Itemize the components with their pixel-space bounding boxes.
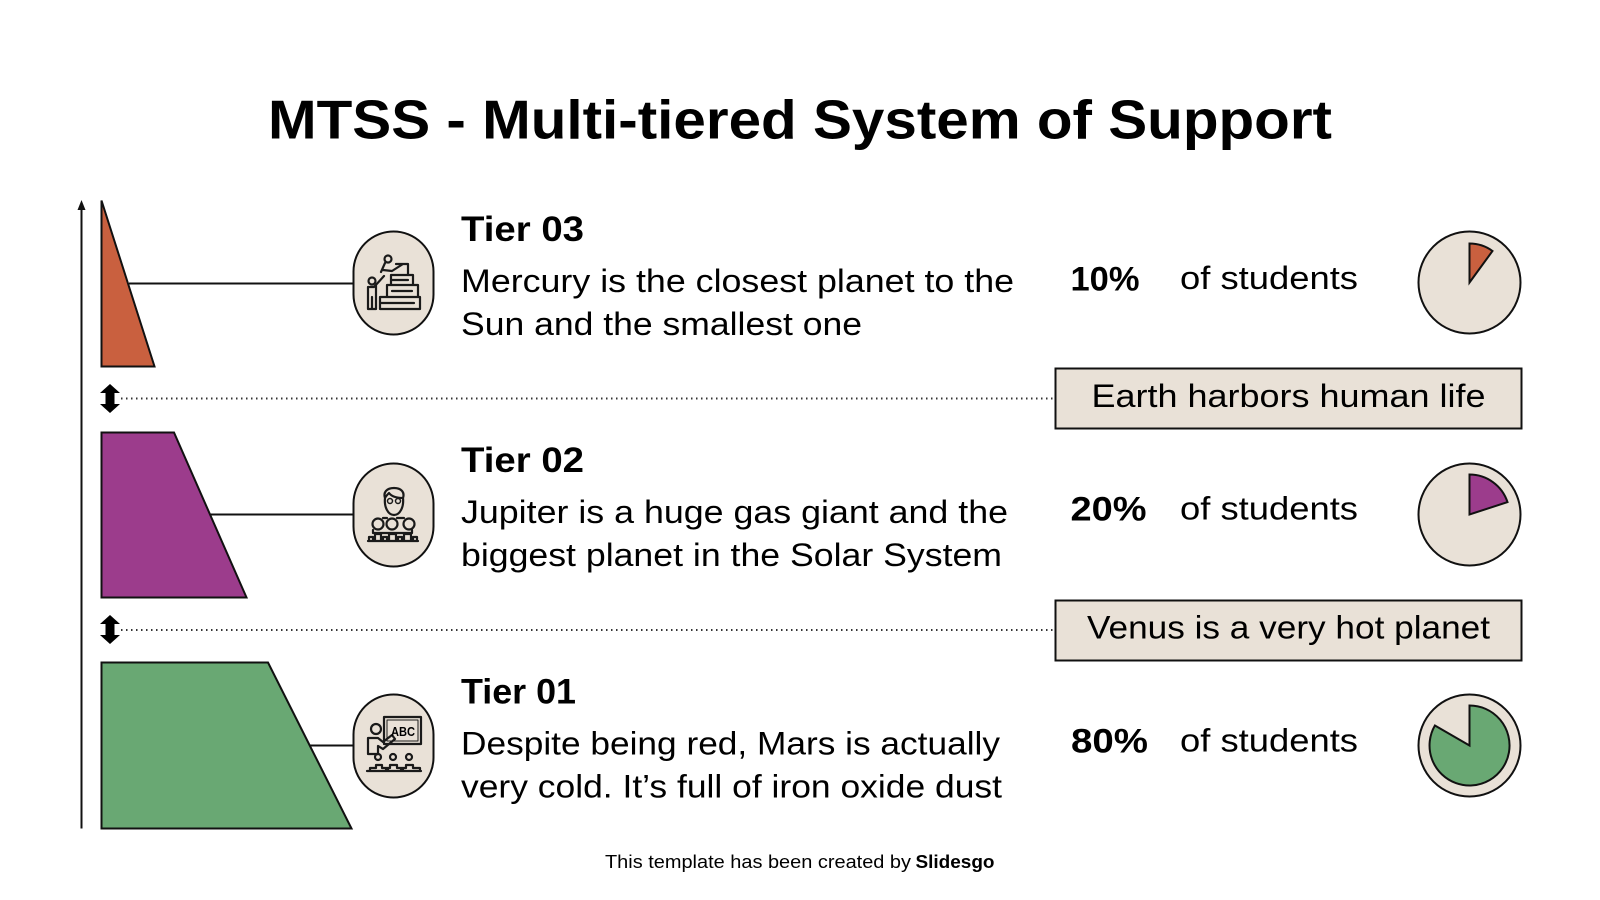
icon: teacher with students — [354, 464, 434, 566]
tier 01 description: Despite being red, Mars is actually — [461, 726, 1000, 762]
dotted divider upper — [121, 398, 1055, 400]
stat: 20 percent — [1070, 490, 1358, 528]
stat: 80 percent: of students — [1180, 722, 1358, 758]
tier 02 description — [461, 494, 1008, 573]
pie chart: 20 percent — [1418, 464, 1520, 566]
tier 01 heading: Tier 01 — [461, 672, 576, 712]
pyramid segment: tier 02 — [102, 432, 246, 598]
footer credit: This template has been created by — [605, 852, 911, 872]
footer credit: Slidesgo — [916, 852, 995, 872]
icon: teacher at ABC board — [354, 694, 434, 798]
callout: Earth — [1056, 368, 1522, 428]
pyramid segment: tier 03 — [102, 200, 154, 366]
tier 02 description: biggest planet in the Solar System — [461, 537, 1002, 573]
vertical axis arrow — [78, 200, 86, 828]
tier 02 heading: Tier 02 — [461, 441, 584, 480]
tier 02 description: Jupiter is a huge gas giant and the — [461, 494, 1008, 530]
callout: Venus: Venus is a very hot planet — [1087, 610, 1490, 646]
tier 03 description — [461, 263, 1014, 342]
tier 03 description: Mercury is the closest planet to the — [461, 263, 1014, 299]
double arrow between tier 03 and tier 02 — [100, 384, 120, 413]
icon: teacher at ABC board: ABC — [391, 724, 416, 739]
stat: 80 percent — [1071, 722, 1358, 760]
double arrow between tier 02 and tier 01 — [100, 615, 120, 644]
connector line tier 02 — [208, 514, 354, 516]
pyramid segment: tier 01 — [102, 662, 352, 828]
tier 01 description: very cold. It’s full of iron oxide dust — [461, 768, 1002, 804]
dotted divider lower — [121, 629, 1055, 631]
title: MTSS - Multi-tiered System of Support — [268, 88, 1332, 150]
stat: 20 percent: 20% — [1070, 490, 1146, 528]
connector line tier 01 — [308, 744, 354, 746]
icon: teacher lifting books — [354, 232, 434, 334]
stat: 10 percent — [1070, 260, 1358, 298]
tier 03 heading: Tier 03 — [461, 210, 584, 249]
stat: 80 percent: 80% — [1071, 722, 1148, 760]
connector line tier 03 — [129, 282, 354, 284]
callout: Venus — [1056, 600, 1522, 660]
stat: 10 percent: of students — [1180, 260, 1358, 296]
tier 01 description — [461, 726, 1002, 804]
pie chart: 10 percent — [1418, 232, 1520, 334]
pie chart: 80 percent — [1418, 694, 1520, 796]
callout: Earth: Earth harbors human life — [1092, 378, 1486, 414]
stat: 10 percent: 10% — [1070, 260, 1140, 298]
tier 03 description: Sun and the smallest one — [461, 306, 862, 342]
stat: 20 percent: of students — [1180, 490, 1358, 526]
